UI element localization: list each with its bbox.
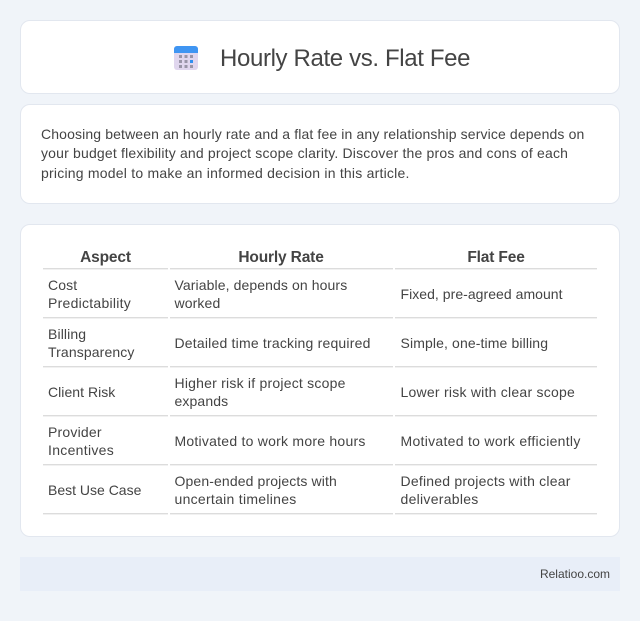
table row: cost predictability: Variable, depends on hours [174,277,347,293]
table row: best use case: uncertain timelines [174,491,297,507]
table row: client risk: expands [174,393,228,409]
footer: source [20,557,620,591]
table row: best use case: deliverables [400,491,479,507]
table row: provider incentives [48,424,581,458]
table row: billing transparency: Simple, one-time billing [400,335,548,351]
table row: billing transparency: Transparency [48,344,135,360]
table row: billing transparency [48,326,548,360]
text block: introduction: your budget flexibility and project scope clarity. Discover the pros and cons of each [41,145,568,161]
panel: title header [20,20,620,94]
text block: introduction [41,126,584,181]
table row: client risk: Higher risk if project scope [174,375,346,391]
panel: comparison table [20,224,620,537]
table row: cost predictability [48,277,563,311]
title: Hourly Rate vs. Flat Fee [220,45,470,72]
table row: best use case: Defined projects with clear [400,473,571,489]
table header row: Aspect [80,249,131,266]
table row: billing transparency: Detailed time tracking required [174,335,371,351]
table header row [80,249,525,266]
table row: provider incentives: Motivated to work more hours [174,433,366,449]
table row: cost predictability: worked [174,295,220,311]
table row: best use case [48,473,571,507]
table row: provider incentives: Provider [48,424,102,440]
table row: cost predictability: Fixed, pre-agreed amount [400,286,563,302]
footer text: Relatioo.com [540,567,610,581]
table row: client risk [48,375,575,409]
table row: client risk: Client Risk [48,384,115,400]
table row: best use case: Best Use Case [48,482,141,498]
table header row: Hourly Rate [238,249,324,266]
table row: provider incentives: Incentives [48,442,114,458]
table row: cost predictability: Predictability [48,295,131,311]
table row: client risk: Lower risk with clear scope [400,384,575,400]
text block: introduction: pricing model to make an informed decision in this article. [41,165,410,181]
table header row: Flat Fee [467,249,525,266]
table row: cost predictability: Cost [48,277,77,293]
table row: billing transparency: Billing [48,326,86,342]
table row: best use case: Open-ended projects with [174,473,337,489]
panel: introduction [20,104,620,204]
text block: introduction: Choosing between an hourly rate and a flat fee in any relationship service depends on [41,126,584,142]
table row: provider incentives: Motivated to work efficiently [400,433,581,449]
icon: calendar [174,46,198,70]
